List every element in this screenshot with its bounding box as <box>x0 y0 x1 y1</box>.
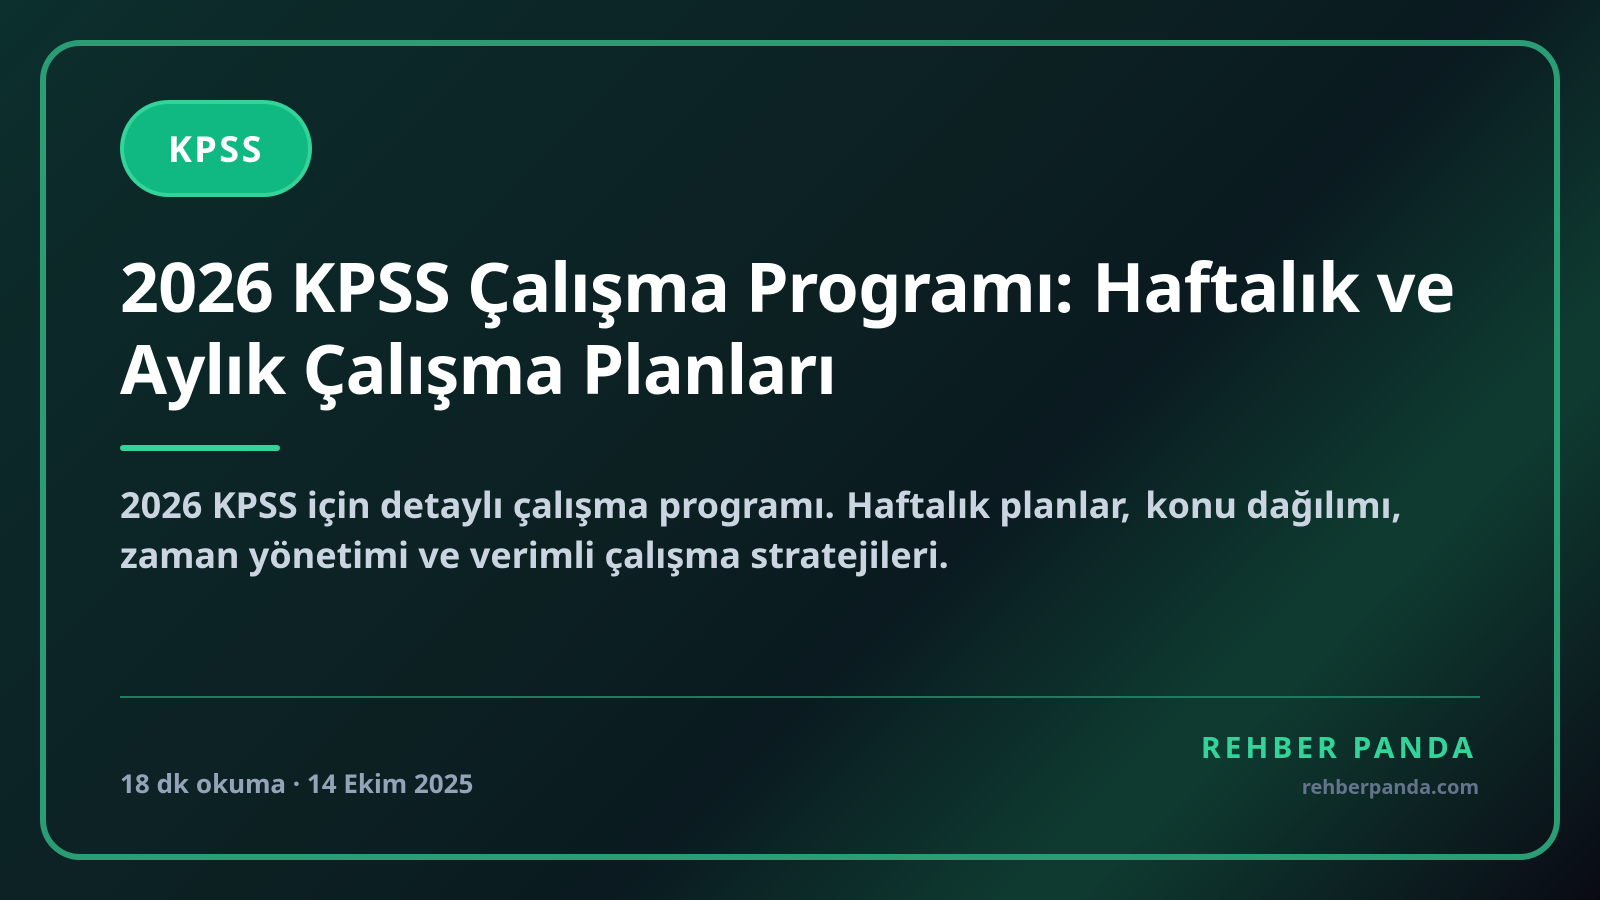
title: Aylık Çalışma Planları <box>120 321 836 414</box>
badge: KPSS <box>120 100 312 197</box>
accent bar <box>120 445 280 451</box>
brand name: REHBER PANDA <box>1201 726 1477 767</box>
title: 2026 KPSS Çalışma Programı: Haftalık ve <box>120 239 1455 332</box>
reading time and date: 18 dk okuma · 14 Ekim 2025 <box>120 765 473 801</box>
website: rehberpanda.com <box>1302 773 1479 800</box>
title <box>120 239 1455 414</box>
footer divider <box>120 696 1480 698</box>
subtitle: zaman yönetimi ve verimli çalışma stratejileri. <box>120 530 949 579</box>
subtitle: 2026 KPSS için detaylı çalışma programı. Haftalık planlar, konu dağılımı, <box>120 480 1402 529</box>
subtitle <box>120 480 1402 579</box>
badge: KPSS: KPSS <box>168 124 264 173</box>
